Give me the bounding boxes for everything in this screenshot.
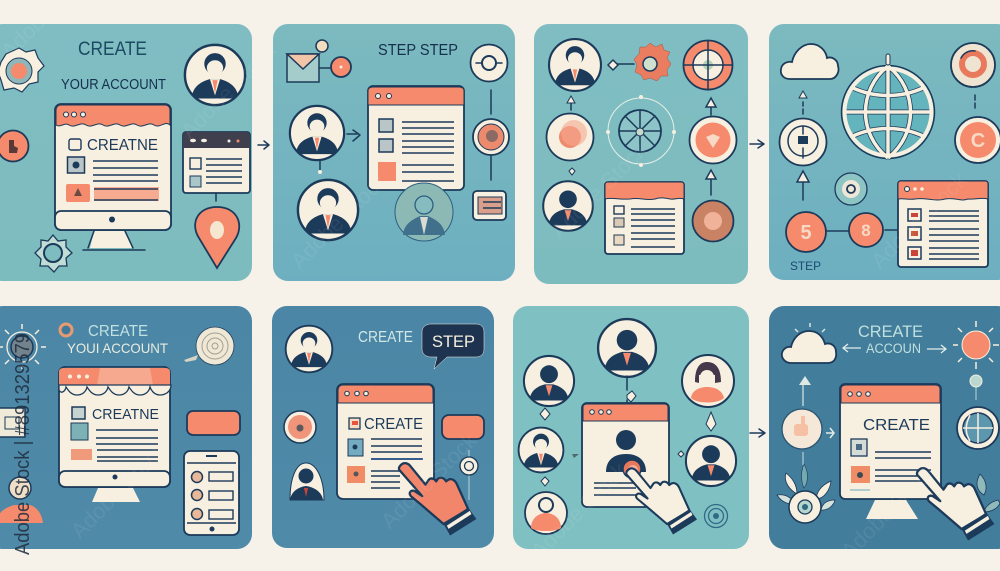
browser window — [605, 182, 684, 254]
panel 6: create step — [272, 306, 494, 548]
window title: CREATNE — [92, 407, 159, 423]
panel 1: create your account — [0, 24, 252, 281]
icon: small q badge — [835, 173, 867, 205]
browser window — [368, 86, 464, 190]
panel 4: globe network — [769, 24, 1000, 280]
icon: gear bottom — [35, 235, 72, 272]
icon: orange gear — [634, 43, 671, 81]
icon: orange badge — [284, 411, 316, 443]
icon: crosshair target — [684, 40, 732, 90]
icon: number 5 badge: 5 — [800, 222, 812, 244]
icon: woman avatar — [682, 355, 734, 407]
heading: your account: YOUR ACCOUNT — [61, 77, 166, 93]
browser window — [337, 384, 434, 499]
icon: number 5 badge — [786, 212, 826, 252]
icon: cloud — [781, 44, 839, 79]
arrow: panel 3 to 4 — [750, 140, 764, 148]
icon: number 8 badge — [849, 213, 883, 247]
panel 8: create account, dark — [769, 306, 1000, 549]
icon: orange avatar — [525, 492, 567, 534]
icon: web badge — [780, 118, 826, 166]
heading: create: CREATE — [88, 323, 148, 340]
speech bubble: step: STEP — [432, 333, 475, 351]
icon: globe badge — [957, 407, 999, 449]
faint diagonal stock watermarks: Adobe Stock — [546, 137, 652, 244]
icon: target right — [470, 44, 508, 82]
panel 7: people network — [513, 306, 749, 549]
icon: leaves badge — [777, 452, 835, 523]
browser window — [898, 181, 988, 267]
window title: CREATE — [863, 417, 930, 434]
icon: person left — [0, 477, 43, 523]
icon: avatar lower — [298, 180, 358, 240]
icon: avatar top — [549, 39, 601, 91]
icon: small orange ring — [60, 324, 72, 336]
desktop monitor with shop awning — [59, 367, 171, 502]
orange button — [442, 415, 484, 439]
faint diagonal stock watermarks: Adobe Stock — [286, 167, 392, 274]
icon: envelope — [287, 40, 351, 82]
icon: avatar lower — [543, 181, 593, 231]
label: step: STEP — [790, 261, 821, 273]
icon: number 8 badge: 8 — [861, 221, 871, 240]
faint diagonal stock watermarks: Adobe Stock — [66, 437, 172, 544]
heading: create: CREATE — [858, 323, 923, 341]
browser window with avatar — [582, 403, 669, 507]
faint diagonal stock watermarks: Adobe Stock — [526, 457, 632, 564]
icon: compass wheel — [606, 95, 676, 167]
icon: browser fragment left — [0, 408, 25, 437]
icon: orange pointing hand — [399, 463, 476, 535]
arrows beside heading — [843, 344, 946, 353]
leaf right — [977, 474, 1000, 512]
icon: orange C badge: C — [971, 130, 985, 152]
icon: person avatar — [185, 45, 245, 105]
icon: orange badge left — [0, 130, 28, 162]
window title: CREATNE — [87, 137, 158, 154]
icon: orange C badge — [955, 117, 1000, 163]
faint diagonal stock watermarks: Adobe Stock — [176, 37, 282, 144]
desktop monitor with form — [55, 104, 171, 250]
icon: concentric ring — [704, 504, 728, 528]
icon: globe — [842, 54, 934, 158]
panel 3: network of icons — [534, 24, 748, 284]
heading: your account: YOUI ACCOUNT — [67, 340, 168, 356]
phone — [184, 451, 239, 535]
panel 5: create your account, dark — [0, 306, 252, 549]
icon: white pointing hand — [917, 468, 994, 540]
icon: brown badge — [692, 200, 734, 242]
window title: CREATE — [364, 416, 423, 433]
icon: spiral seal — [184, 327, 234, 365]
icon: orange ring right — [473, 119, 509, 155]
heading: STEP STEP — [378, 42, 458, 59]
heading: CREATE — [358, 329, 413, 346]
icon: gear top left — [0, 48, 44, 92]
stock watermark: vertical id text: Adobe Stock | #891329579 — [12, 333, 34, 555]
faint diagonal stock watermarks: Adobe Stock — [836, 457, 942, 564]
icon: orange note badge — [782, 409, 822, 449]
monitor window — [840, 384, 941, 519]
connector diamonds — [540, 376, 716, 486]
heading: account: ACCOUN — [866, 341, 921, 356]
icon: orange ring badge — [951, 43, 995, 87]
icon: orange heart badge — [690, 116, 736, 164]
icon: sun — [953, 321, 999, 369]
icon: small teal dot — [970, 375, 982, 387]
icon: orange badge left — [546, 114, 594, 160]
icon: avatar with arrow — [290, 106, 344, 160]
arrow up — [802, 180, 804, 200]
icon: map pin — [195, 207, 239, 268]
speech bubble: step — [422, 324, 484, 369]
faint diagonal stock watermarks: Adobe Stock — [376, 427, 482, 534]
arrow: panel 1 to 2 — [258, 141, 269, 149]
icon: avatars — [598, 319, 656, 377]
faint diagonal stock watermarks: Adobe Stock — [866, 167, 972, 274]
arrow up — [799, 376, 811, 406]
icon: faded avatar — [395, 183, 453, 241]
icon: small card — [473, 191, 506, 220]
heading: create: CREATE — [78, 39, 147, 60]
orange button — [187, 411, 240, 435]
icon: sun badge — [0, 324, 46, 369]
icon: small ring with line — [460, 450, 478, 500]
panel 2: step step — [273, 24, 515, 281]
icon: white pointing hand — [626, 468, 697, 534]
small browser window — [183, 132, 250, 193]
arrow: panel 7 to 8 — [750, 429, 765, 437]
icon: cloud — [782, 331, 836, 363]
icon: avatar top — [286, 326, 332, 372]
icon: avatar bust — [290, 463, 324, 500]
